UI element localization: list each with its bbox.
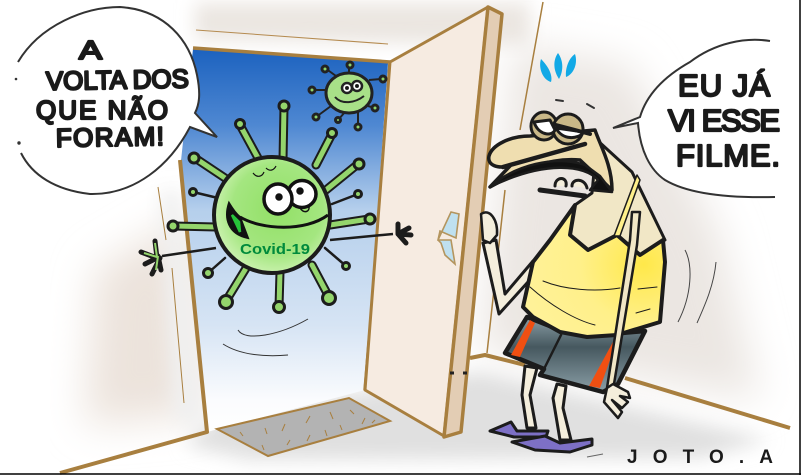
speech text right: VI ESSE (668, 103, 780, 138)
virus body (214, 157, 330, 273)
raised arm (483, 240, 537, 314)
shorts (505, 317, 645, 392)
long arm and hand (604, 212, 640, 418)
speech text left: VOLTA DOS (46, 63, 189, 96)
door handle (438, 212, 459, 264)
tank top (523, 205, 665, 337)
speech text left: A (79, 35, 103, 65)
virus label: Covid-19 (240, 241, 310, 258)
head and beak (489, 130, 612, 190)
speech text left (36, 35, 189, 153)
speech text right: EU JÁ (678, 68, 770, 103)
neck and chest (570, 140, 665, 255)
legs (522, 366, 571, 440)
signature: JOTO.A (627, 447, 773, 468)
virus arms and hands (141, 224, 411, 274)
speech text left: QUE NÃO (36, 95, 168, 125)
door (365, 7, 502, 437)
large virus (141, 101, 411, 312)
speech bubble right (613, 40, 790, 197)
sweat drops (540, 53, 576, 82)
doorway sky (180, 49, 388, 432)
speech text left: FORAM! (56, 121, 164, 153)
motion lines under virus (223, 319, 308, 356)
speech text right: FILME. (676, 138, 780, 173)
slippers (490, 422, 592, 452)
floor mark (587, 454, 603, 457)
doormat (217, 398, 390, 456)
eyes (531, 112, 590, 144)
shaking motion lines (678, 250, 716, 323)
mouth (503, 144, 585, 167)
speech bubble left (15, 7, 217, 194)
left wall light panel (160, 190, 205, 430)
virus spikes (174, 107, 369, 307)
virus smile (227, 166, 328, 238)
virus eyes (264, 180, 316, 214)
speech text right (668, 68, 780, 173)
character (481, 100, 665, 452)
small virus (309, 62, 386, 130)
